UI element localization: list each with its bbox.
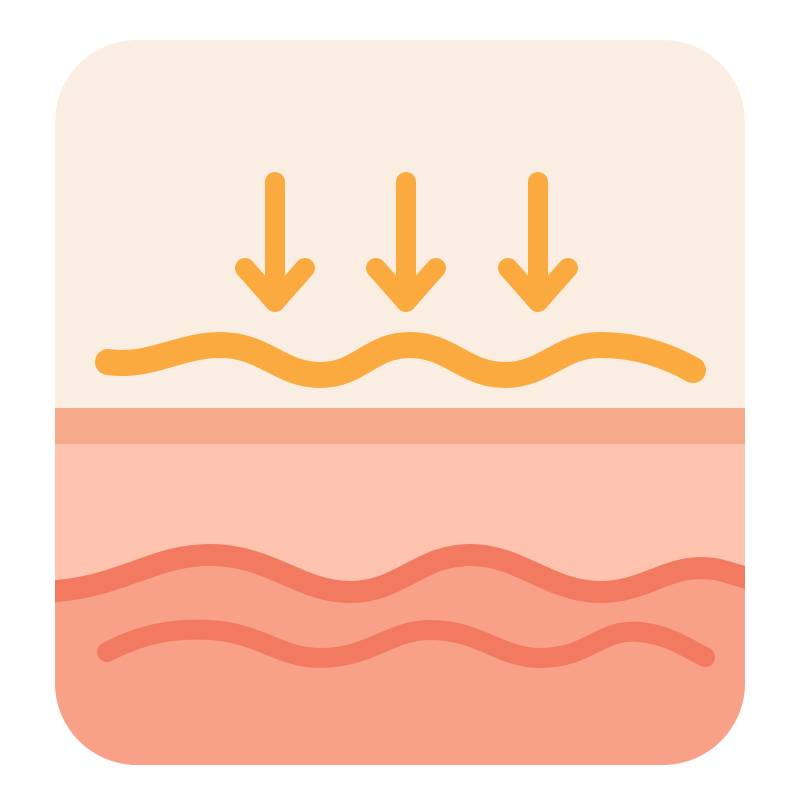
wave: surface layer — [108, 345, 693, 375]
wave: lower layer — [107, 630, 705, 658]
wave: dermis boundary — [40, 555, 760, 592]
arrow 3 — [508, 182, 568, 302]
skin layers icon — [55, 40, 745, 765]
arrow 1 — [245, 182, 305, 302]
arrow 2 — [376, 182, 436, 302]
arrows: pressure — [245, 182, 568, 302]
